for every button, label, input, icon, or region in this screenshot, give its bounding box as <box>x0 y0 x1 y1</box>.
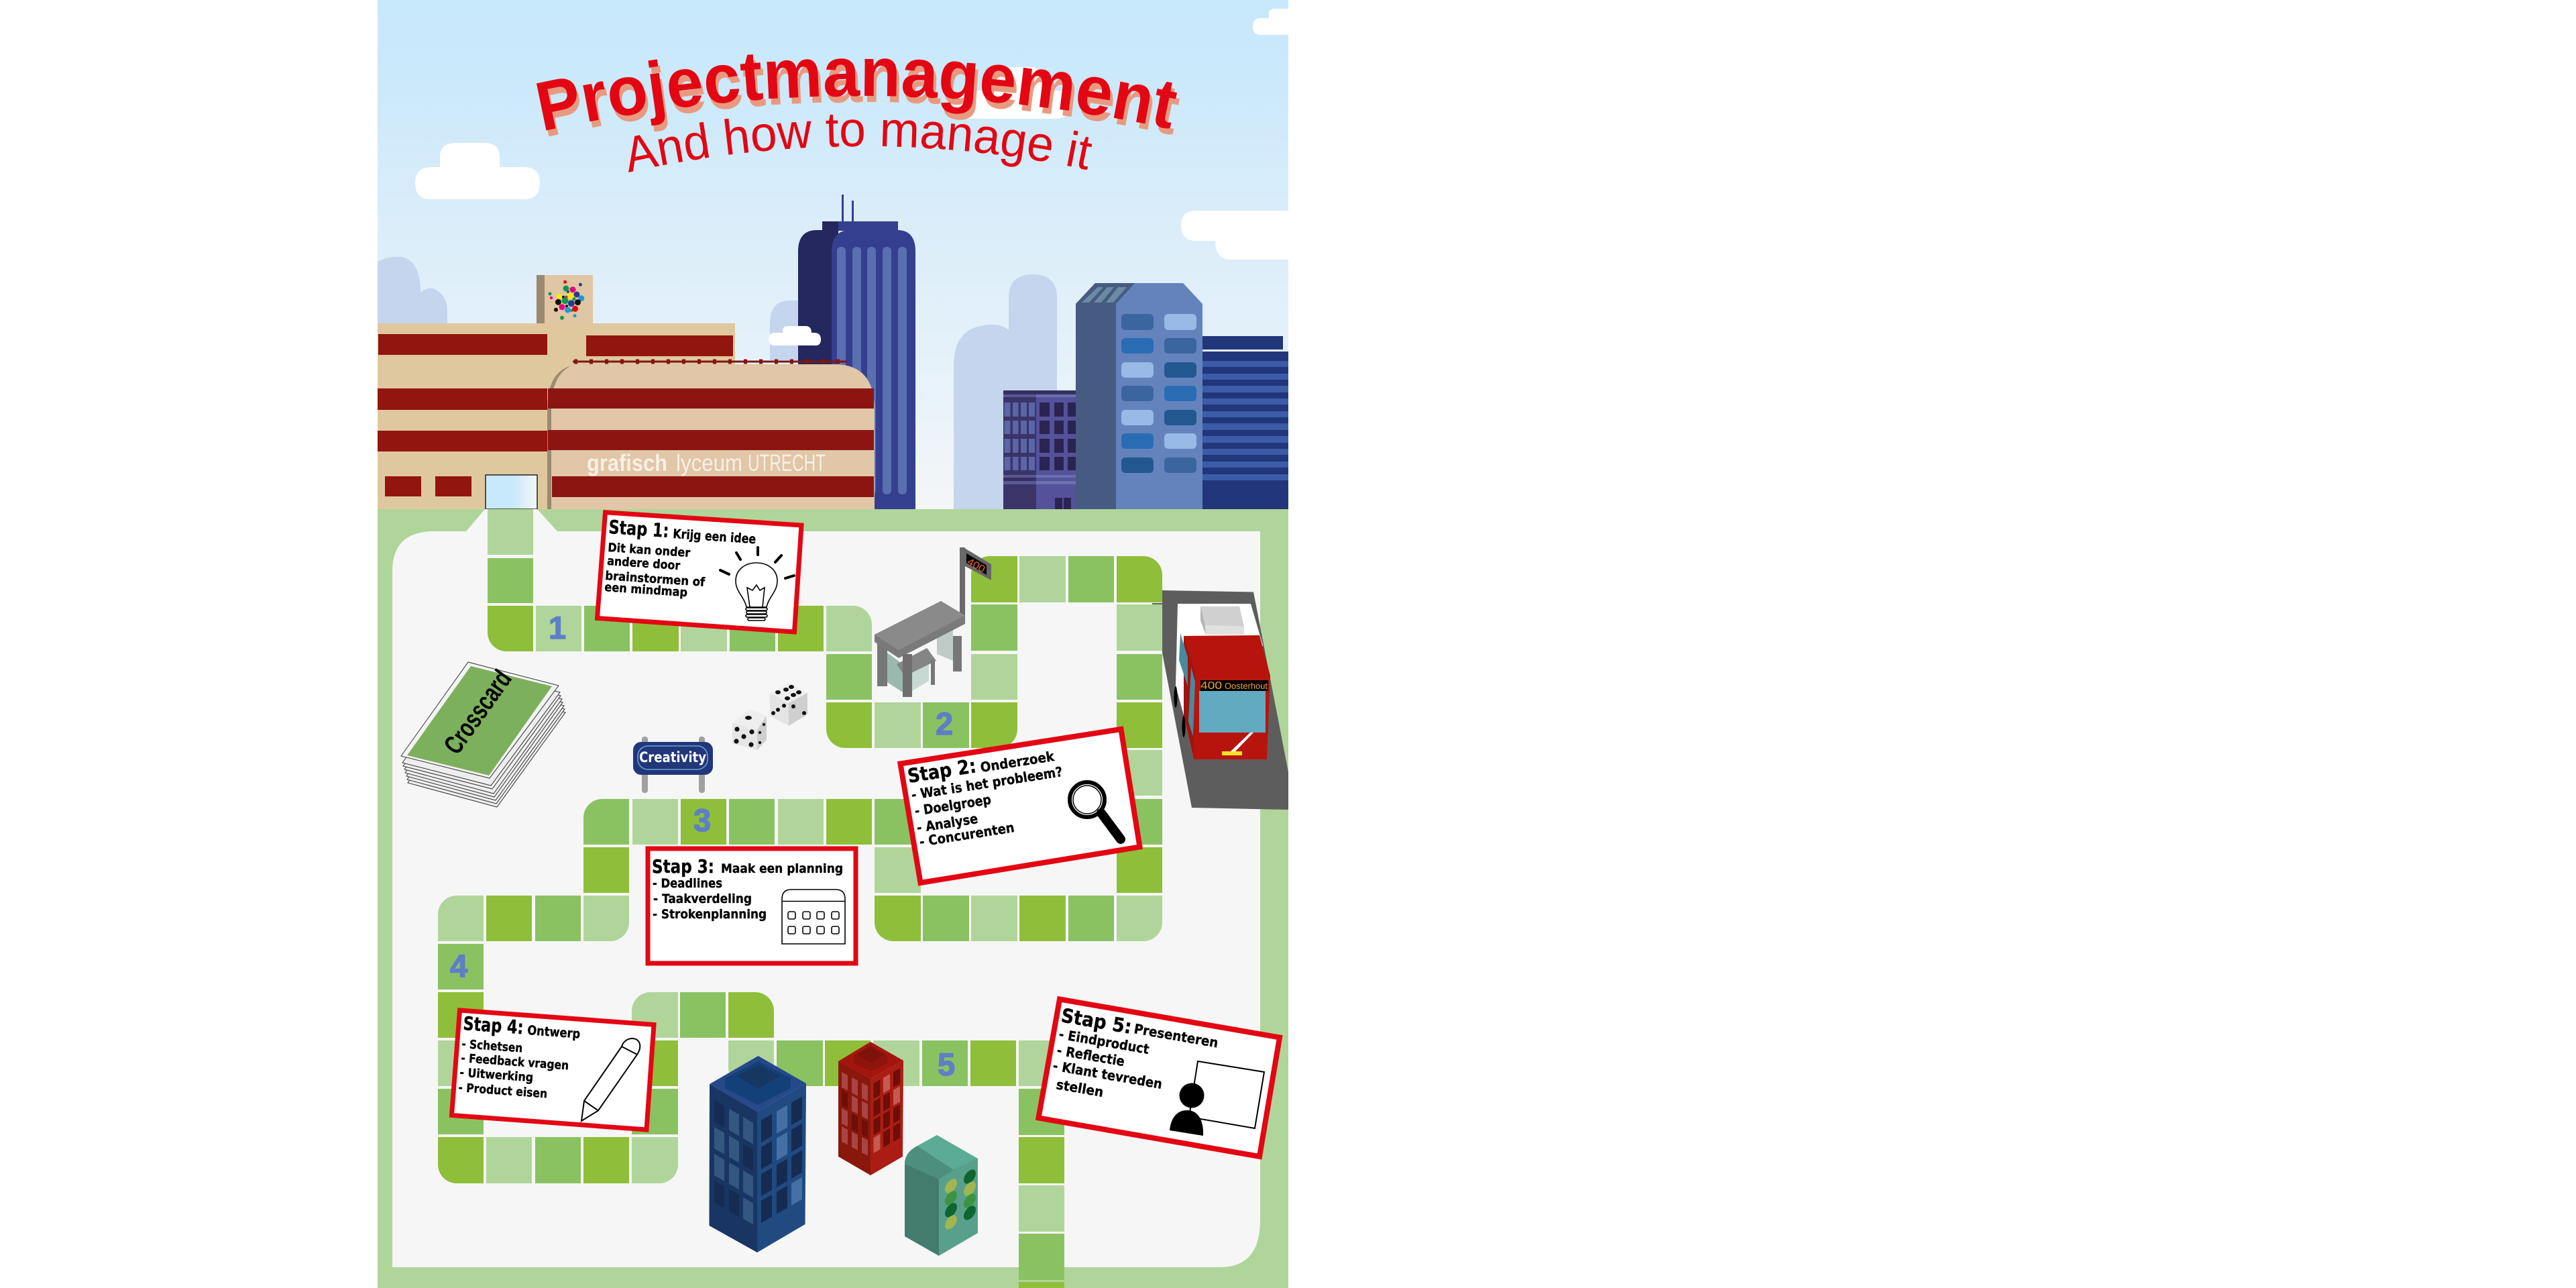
isometric blue building <box>710 1056 806 1252</box>
icon: light bulb <box>720 547 794 621</box>
card: Stap 2: - Concurenten <box>918 819 1015 850</box>
step numbers on the path: 1 <box>549 610 566 645</box>
icon: pencil <box>581 1038 640 1121</box>
card: Stap 4: - Schetsen <box>461 1037 523 1055</box>
card: Stap 5: Presenteren <box>1133 1020 1219 1051</box>
card: Stap 3 <box>648 849 856 963</box>
school front building with name <box>547 362 875 509</box>
Creativity sign <box>633 737 713 793</box>
card: Stap 3: - Deadlines <box>653 876 722 891</box>
dark blue skyscraper <box>798 195 915 509</box>
card: Stap 5 <box>1038 1000 1280 1157</box>
subtitle: And how to manage it <box>628 114 1092 172</box>
isometric teal building <box>905 1135 978 1256</box>
card: Stap 1: brainstormen of <box>605 569 706 590</box>
logo tower with coloured dots <box>537 275 593 323</box>
icon: presenter at whiteboard <box>1170 1061 1264 1136</box>
card: Stap 3: - Strokenplanning <box>653 907 767 922</box>
grafisch lyceum back building <box>378 323 735 509</box>
card: Stap 3: - Taakverdeling <box>653 892 752 906</box>
card: Stap 2: Onderzoek <box>979 748 1056 775</box>
small cloud by the tower <box>769 326 821 345</box>
navy striped building <box>1194 336 1288 509</box>
isometric red building <box>838 1042 903 1175</box>
step numbers on the path: 2 <box>936 706 953 741</box>
icon: dice <box>732 683 807 750</box>
title: Projectmanagement <box>547 60 1180 137</box>
card: Stap 1: andere door <box>607 554 681 573</box>
icon: Crosscard deck <box>401 662 565 807</box>
school door <box>486 475 537 509</box>
school name lettering: lyceum <box>676 450 742 476</box>
card: Stap 1: een mindmap <box>604 580 688 600</box>
card: Stap 2: - Doelgroep <box>913 791 992 819</box>
board path tiles <box>438 509 1162 1288</box>
card: Stap 2 <box>900 729 1140 883</box>
card: Stap 1: Dit kan onder <box>608 541 691 560</box>
title: Projectmanagement <box>537 54 1177 130</box>
card: Stap 5: stellen <box>1055 1076 1105 1100</box>
card: Stap 5: - Reflectie <box>1056 1042 1126 1069</box>
step numbers on the path: 5 <box>938 1046 955 1082</box>
card: Stap 4: - Feedback vragen <box>461 1051 569 1073</box>
card: Stap 4 <box>452 1010 654 1130</box>
step numbers on the path: 3 <box>693 802 711 838</box>
sky background <box>378 0 1288 510</box>
card: Stap 5: Stap 5: <box>1060 1004 1133 1038</box>
bus on road: 400 <box>1200 680 1222 692</box>
board surface <box>392 509 1260 1267</box>
purple office building <box>1003 390 1076 509</box>
card: Stap 4: Ontwerp <box>527 1023 581 1042</box>
bus stop shelter: 400 <box>965 556 987 575</box>
card: Stap 2: - Wat is het probleem? <box>910 763 1064 803</box>
step numbers on the path: 4 <box>450 948 467 983</box>
icon: magnifying glass <box>1070 782 1121 839</box>
card: Stap 4: - Uitwerking <box>459 1066 534 1085</box>
pale skyline silhouettes <box>378 256 1057 509</box>
card: Stap 5: - Klant tevreden <box>1052 1057 1164 1092</box>
light blue apartment tower <box>1076 283 1202 509</box>
ground frame <box>378 509 1288 1288</box>
bus on road <box>1152 590 1288 810</box>
school name lettering <box>587 450 826 476</box>
school name lettering: grafisch <box>587 450 667 476</box>
icon: calendar <box>782 890 845 944</box>
card: Stap 3: Stap 3: <box>652 855 714 877</box>
card: Stap 3: Maak een planning <box>721 861 843 876</box>
card: Stap 2: Stap 2: <box>906 754 978 788</box>
step numbers on the path <box>450 610 955 1082</box>
clouds <box>415 9 1288 260</box>
card: Stap 1 <box>597 513 801 632</box>
bus on road: Oosterhout <box>1225 681 1268 691</box>
card: Stap 1: Krijg een idee <box>673 527 757 547</box>
card: Stap 2: - Analyse <box>915 810 979 836</box>
bus stop shelter <box>875 547 991 697</box>
Creativity sign: Creativity <box>639 749 706 765</box>
card: Stap 5: - Eindproduct <box>1058 1026 1151 1057</box>
card: Stap 4: Stap 4: <box>462 1012 524 1038</box>
school name lettering: UTRECHT <box>748 450 826 476</box>
card: Stap 4: - Product eisen <box>458 1081 548 1101</box>
icon: Crosscard deck: Crosscard <box>439 665 518 759</box>
card: Stap 1: Stap 1: <box>608 516 670 542</box>
